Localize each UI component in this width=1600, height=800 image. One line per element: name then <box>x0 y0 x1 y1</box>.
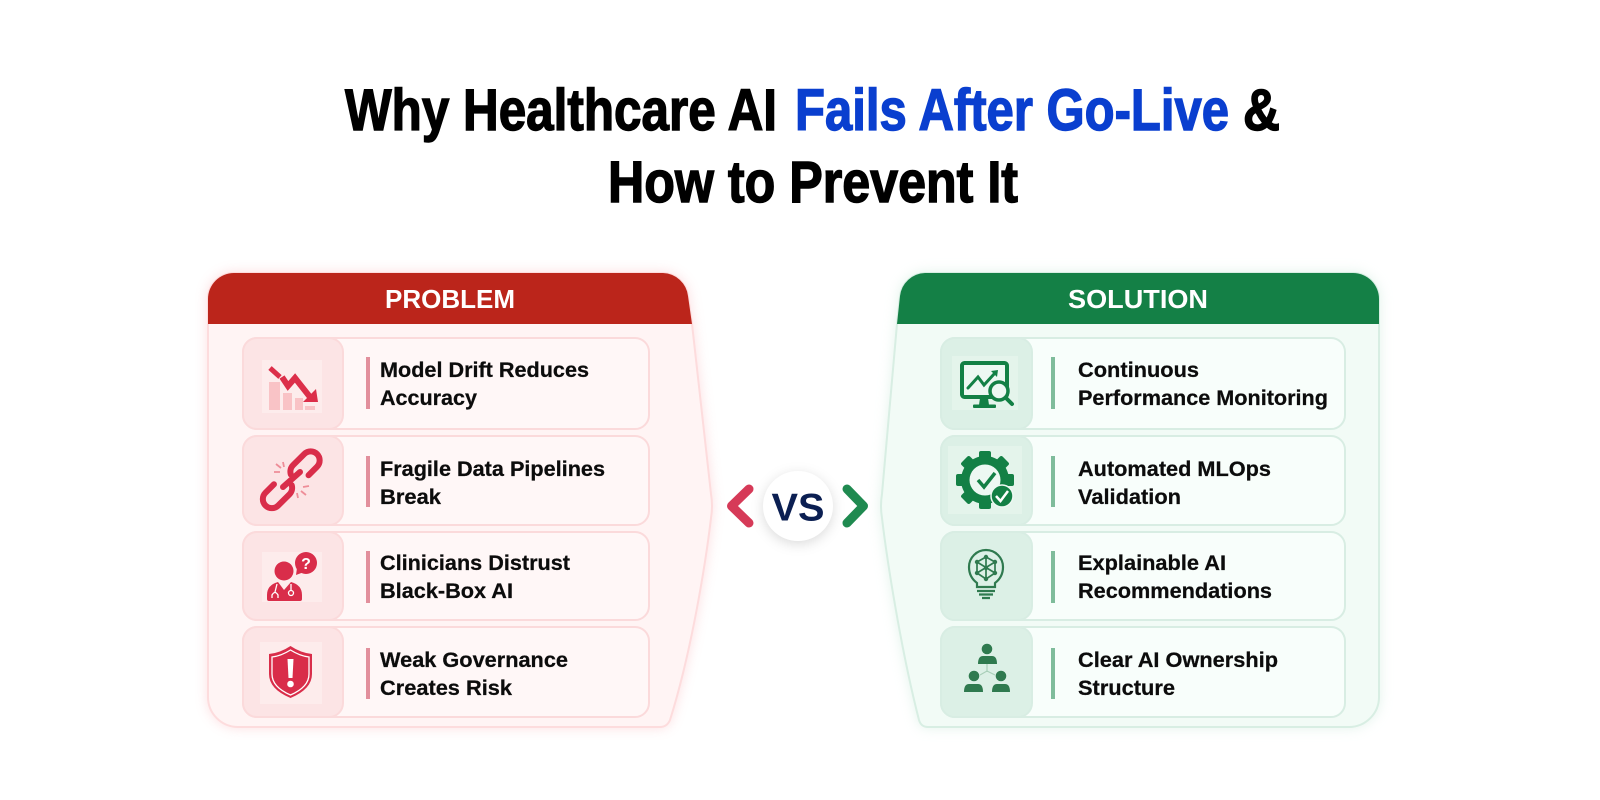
solution row 1: Performance Monitoring <box>1078 387 1328 410</box>
icon: falling chart <box>262 360 322 413</box>
problem header: PROBLEM <box>385 284 515 314</box>
title: & <box>1243 78 1280 143</box>
panel: solution <box>881 273 1379 727</box>
solution row 2: Automated MLOps <box>1078 458 1271 481</box>
problem header <box>208 273 692 324</box>
icon: team hierarchy <box>964 644 1010 692</box>
icon: monitor with magnifier <box>952 356 1018 410</box>
solution row 2 <box>941 436 1345 525</box>
title: How to Prevent It <box>608 150 1018 215</box>
vs badge: VS <box>772 486 824 530</box>
problem row 1: Model Drift Reduces <box>380 359 589 382</box>
problem row 3: Black-Box AI <box>380 580 513 603</box>
title: Fails After Go-Live <box>795 78 1229 143</box>
solution row 4: Clear AI Ownership <box>1078 649 1278 672</box>
icon: warning shield <box>260 642 322 704</box>
icon: doctor with question <box>262 552 322 602</box>
problem row 4: Weak Governance <box>380 649 568 672</box>
solution row 3 <box>941 532 1345 620</box>
solution row 3: Recommendations <box>1078 580 1272 603</box>
problem row 2: Fragile Data Pipelines <box>380 458 605 481</box>
problem row 1: Accuracy <box>380 387 477 410</box>
solution row 4: Structure <box>1078 677 1175 700</box>
arrow: right chevron <box>847 489 864 523</box>
title: Why Healthcare AI <box>345 78 777 143</box>
icon: doctor with question: ? <box>301 556 311 573</box>
solution row 3: Explainable AI <box>1078 552 1226 575</box>
solution header <box>897 273 1379 324</box>
icon: gear with check <box>948 446 1022 514</box>
solution row 4 <box>941 627 1345 717</box>
vs badge <box>732 471 864 541</box>
icon: broken chain <box>259 448 323 512</box>
panel: problem <box>208 273 712 727</box>
problem row 1 <box>243 338 649 429</box>
problem row 2 <box>243 436 649 525</box>
icon: lightbulb network <box>969 550 1003 598</box>
solution row 2: Validation <box>1078 486 1181 509</box>
problem row 4 <box>243 627 649 717</box>
problem row 3 <box>243 532 649 620</box>
solution row 1: Continuous <box>1078 359 1199 382</box>
solution row 1 <box>941 338 1345 429</box>
problem row 2: Break <box>380 486 441 509</box>
problem row 3: Clinicians Distrust <box>380 552 570 575</box>
title <box>345 78 1280 215</box>
solution header: SOLUTION <box>1068 284 1208 314</box>
problem row 4: Creates Risk <box>380 677 512 700</box>
arrow: left chevron <box>732 489 749 523</box>
